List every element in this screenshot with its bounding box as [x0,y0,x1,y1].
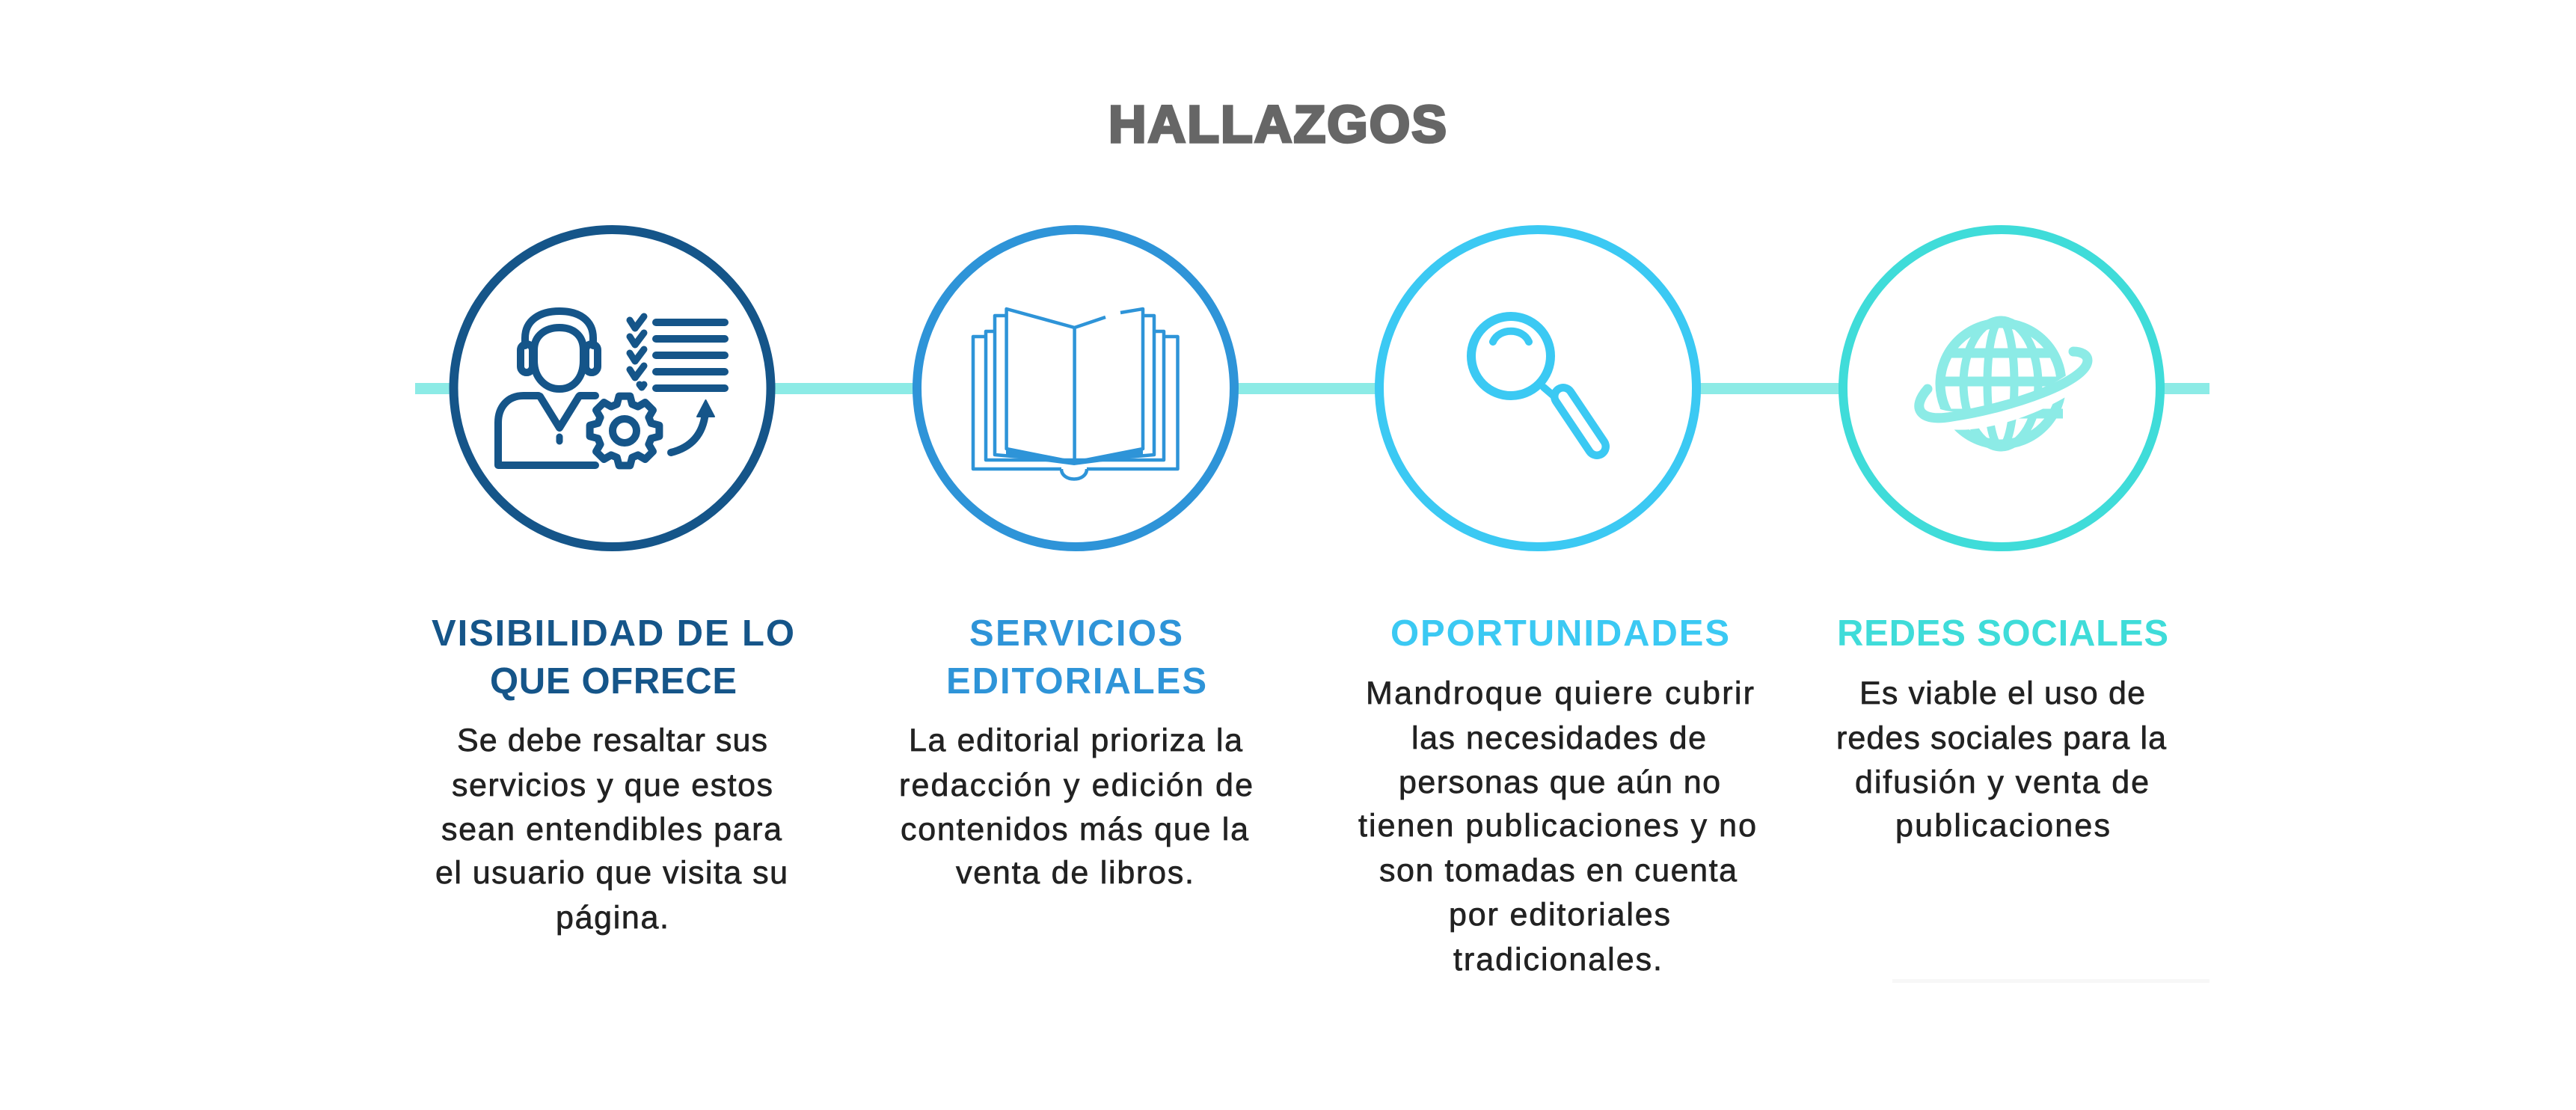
heading: servicios [946,613,1206,702]
heading: visibilidad [432,613,794,702]
panel: oportunidades [1358,230,1756,978]
heading: oportunidades: OPORTUNIDADES [1390,613,1729,654]
text block: redes sociales: redes sociales para la [1836,720,2166,756]
text block: oportunidades: tradicionales. [1453,942,1662,978]
text block: oportunidades: son tomadas en cuenta [1379,853,1737,889]
text block: servicios: redacción y edición de [899,767,1253,803]
text block: visibilidad: página. [556,900,669,936]
text block: redes sociales: difusión y venta de [1855,764,2149,800]
heading: servicios: SERVICIOS [969,613,1183,654]
text block: visibilidad: sean entendibles para [441,812,782,847]
text block: redes sociales: Es viable el uso de [1859,675,2145,711]
text block: oportunidades: las necesidades de [1411,720,1706,756]
text block: servicios: La editorial prioriza la [909,723,1242,758]
circle: oportunidades [1379,230,1696,547]
gear [590,396,659,465]
text block: visibilidad [435,723,788,936]
text block: servicios: contenidos más que la [901,812,1248,847]
text block: oportunidades: tienen publicaciones y no [1358,808,1756,844]
text block: oportunidades: personas que aún no [1399,764,1720,800]
icon: open book [973,309,1177,479]
text block: visibilidad: Se debe resaltar sus [457,723,767,758]
heading: redes sociales: REDES SOCIALES [1837,613,2168,654]
text block: redes sociales: publicaciones [1895,808,2110,844]
text block: oportunidades: Mandroque quiere cubrir [1366,675,1754,711]
text block: redes sociales [1836,675,2166,844]
panel: redes sociales [1836,230,2168,844]
text block: servicios: venta de libros. [956,855,1194,891]
circle: servicios [917,230,1234,547]
connecting timeline line [415,383,2209,394]
text block: oportunidades: por editoriales [1449,897,1670,933]
text block: visibilidad: servicios y que estos [452,767,773,803]
circle: visibilidad [453,230,770,547]
text block: oportunidades [1358,675,1756,978]
circle: redes sociales [1843,230,2160,547]
icon: person with headset, checklist and gear [498,311,725,465]
title: HALLAZGOS [1108,95,1447,153]
icon: magnifying glass [1471,316,1597,447]
text block: servicios [899,723,1253,891]
panel: visibilidad [432,230,794,936]
icon: globe with orbit [1919,320,2088,447]
panel: servicios editoriales [899,230,1253,891]
heading: visibilidad: VISIBILIDAD DE LO [432,613,794,654]
text block: visibilidad: el usuario que visita su [435,855,788,891]
heading: visibilidad: QUE OFRECE [490,661,737,702]
heading: servicios: EDITORIALES [946,661,1206,702]
